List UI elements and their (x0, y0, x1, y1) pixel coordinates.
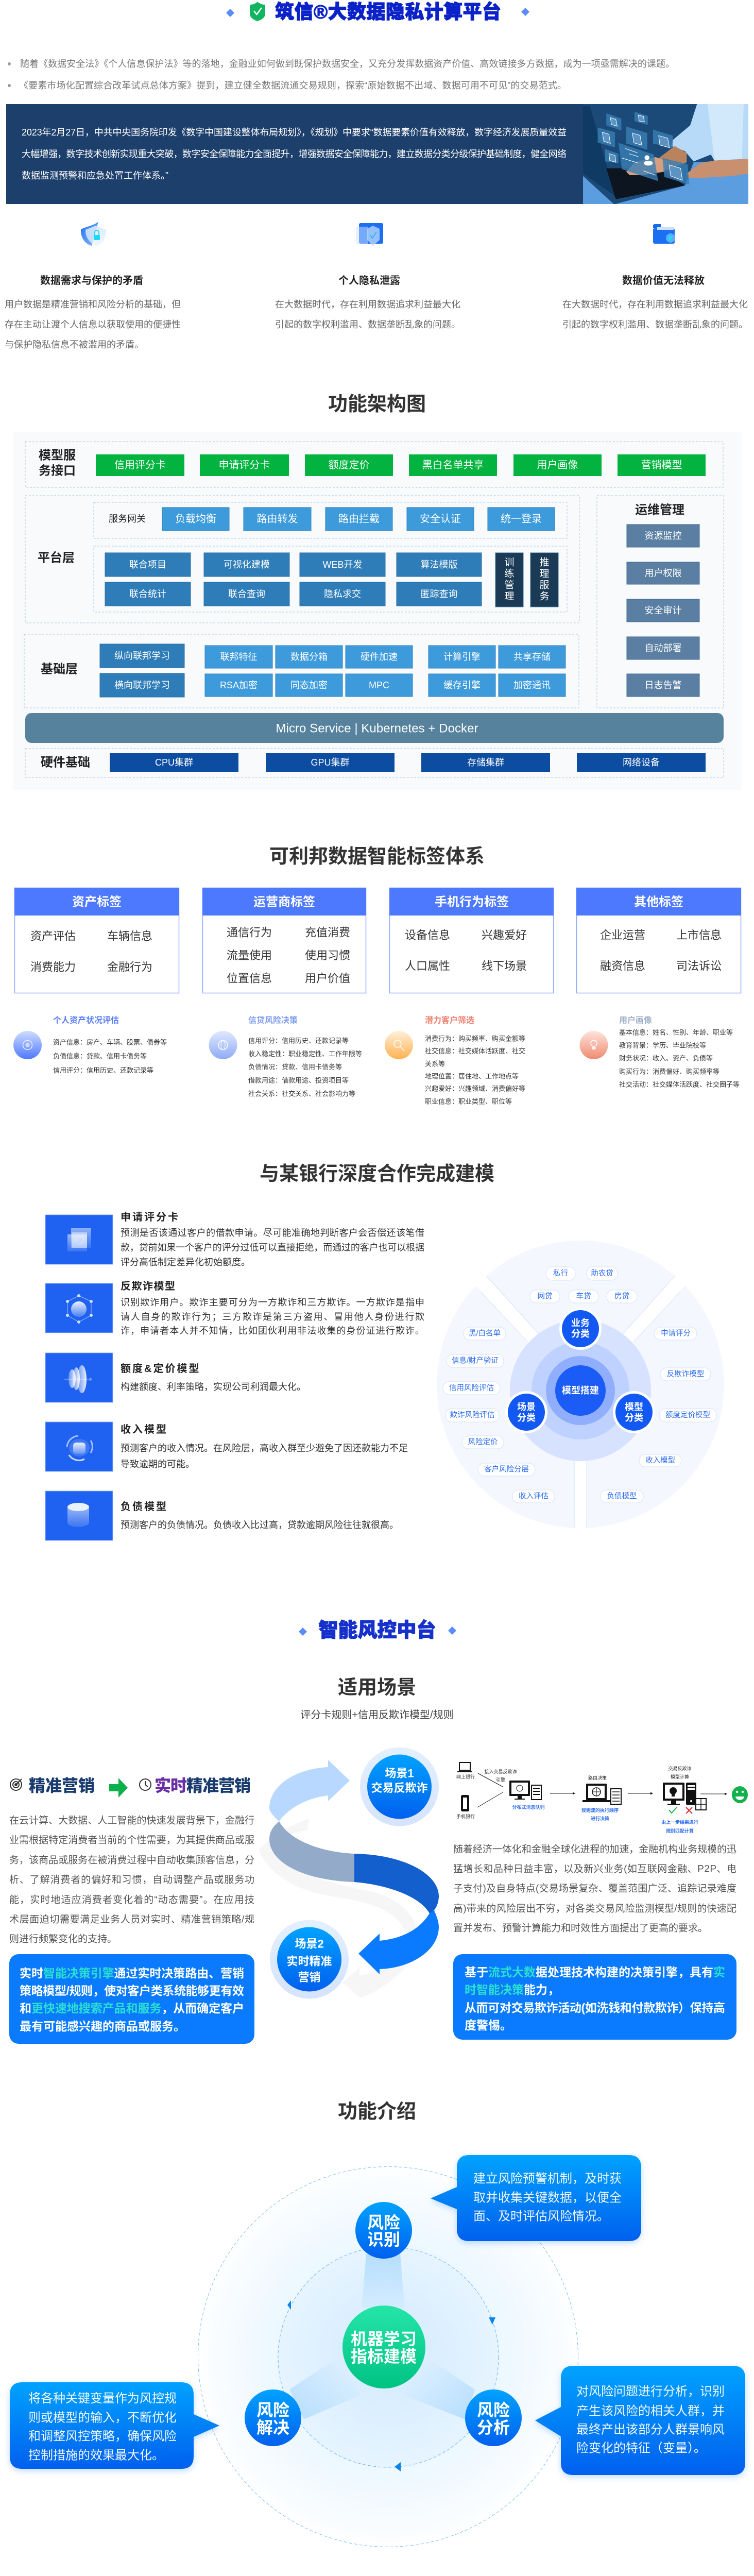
card: carrier labels: 通信行为 (227, 926, 272, 939)
row: platform layer: 联合项目 (129, 560, 166, 570)
text block: marketing description (9, 1815, 254, 1944)
use case: user profile: 财务状况：收入、资产、负债等 (619, 1054, 713, 1062)
flow diagram: transaction anti-fraud (456, 1762, 748, 1834)
callout: resolution: 控制措施的效果最大化。 (28, 2448, 164, 2463)
text: card three: 引起的数字权利滥用、数据垄断乱象的问题。 (562, 319, 748, 330)
card: asset labels: 金融行为 (107, 960, 152, 974)
node: scenario 2: 营销 (298, 1971, 321, 1984)
node: risk analysis: 风险 (477, 2401, 510, 2419)
callout: resolution: 和调整风控策略，确保风险 (28, 2430, 177, 2443)
use case: potential customers: 潜力客户筛选 (425, 1015, 474, 1025)
text block: scenario description: 猛增长和品种日益丰富，以及新兴业务(如互联网金融、P2P、电 (453, 1863, 736, 1874)
flow diagram: transaction anti-fraud: 进行决策 (591, 1816, 609, 1821)
row: model service interface: 申请评分卡 (218, 459, 270, 471)
row: hardware base: 网络设备 (623, 757, 660, 768)
panel: precise marketing: 实时精准营销 (155, 1776, 251, 1795)
pills: models: 额度定价模型 (665, 1411, 710, 1419)
callout: analysis: 险变化的特征（变量）。 (576, 2441, 706, 2455)
concentric circles: 模型搭建 (562, 1385, 599, 1396)
model: income: 收入模型 (121, 1423, 168, 1435)
model: quota and pricing (45, 1353, 306, 1402)
model: anti-fraud (45, 1280, 424, 1336)
pills: models (601, 1327, 716, 1503)
node: risk resolution: 解决 (256, 2418, 289, 2437)
use case: credit risk: 社会关系：社交关系、社会影响力等 (248, 1090, 355, 1097)
flow diagram: transaction anti-fraud: 引擎 (496, 1777, 505, 1783)
row: platform layer: 训 (504, 556, 515, 568)
node: risk analysis: 分析 (477, 2418, 510, 2437)
column: operations management: 运维管理 (635, 503, 684, 517)
intro bullet points: 随着《数据安全法》《个人信息保护法》等的落地，金融业如何做到既保护数据安全，又充分发挥数据资产价值、高效链接多方数据，成为一项亟需解决的课题。 (20, 59, 675, 69)
text: card two (275, 275, 460, 330)
flow diagram: transaction anti-fraud: 接入交易反欺诈 (484, 1769, 517, 1774)
node: scenario class: 场景 (517, 1402, 536, 1412)
card: phone behaviour labels: 兴趣爱好 (482, 928, 527, 942)
column: operations management: 资源监控 (645, 531, 682, 541)
card: carrier labels: 使用习惯 (305, 949, 350, 962)
row: model service interface: 用户画像 (537, 459, 578, 471)
pills: scenarios (443, 1327, 555, 1503)
use case: potential customers: 关系等 (425, 1060, 445, 1067)
card: phone behaviour labels: 线下场景 (482, 959, 527, 973)
node: machine learning modelling: 指标建模 (351, 2347, 417, 2366)
bar: micro service: Micro Service | Kubernetes + Docker (276, 721, 478, 736)
card: other labels: 司法诉讼 (676, 959, 722, 973)
use case: credit risk: 收入稳定性：职业稳定性、工作年限等 (248, 1050, 362, 1058)
column: operations management: 用户权限 (645, 568, 682, 578)
use case: user profile: 教育背景：学历、毕业院校等 (619, 1042, 706, 1049)
use case: user profile: 用户画像 (619, 1015, 652, 1025)
row: platform layer: WEB开发 (322, 560, 363, 570)
heading: bank co-modelling: 与某银行深度合作完成建模 (260, 1163, 494, 1185)
card: other labels (576, 888, 741, 993)
node: risk identification (355, 2202, 412, 2259)
card: carrier labels: 流量使用 (227, 949, 272, 962)
icon: queue monitor (509, 1781, 541, 1800)
use case: potential customers: 地理位置：居住地、工作地点等 (425, 1073, 519, 1080)
text: card one: 数据需求与保护的矛盾 (40, 275, 143, 286)
text block: scenario description: 子支付)及自身特点(交易场景复杂、覆盖范围广泛、追踪记录难度 (453, 1883, 736, 1894)
model: quota and pricing: 额度&定价模型 (121, 1362, 200, 1375)
callout: resolution: 将各种关键变量作为风控规 (28, 2392, 177, 2405)
node: business class (559, 1308, 602, 1350)
panel: label use cases (13, 1015, 740, 1106)
pills: scenarios: 欺诈风险评估 (450, 1411, 494, 1419)
concentric circles (510, 1320, 651, 1461)
use case: personal assets: 个人资产状况评估 (53, 1015, 119, 1025)
use case: potential customers: 兴趣爱好：兴趣领域、消费偏好等 (425, 1085, 525, 1092)
callout: identification: 面、及时评估风险情况。 (473, 2209, 609, 2224)
card: carrier labels: 运营商标签 (253, 895, 315, 909)
callout: streaming engine: 时智能决策能力， (465, 1983, 559, 1996)
section: bank co-modelling (45, 1163, 724, 1540)
row: foundation layer: 纵向联邦学习 (114, 651, 170, 661)
use case: credit risk (209, 1015, 362, 1097)
panel: label cards (14, 888, 741, 993)
pills: models: 负债模型 (607, 1492, 637, 1500)
callout: decision engine (9, 1954, 254, 2044)
flow diagram: transaction anti-fraud: 规则流的执行顺序 (581, 1807, 619, 1813)
use case: user profile: 基本信息：姓名、性别、年龄、职业等 (619, 1028, 733, 1037)
card: phone behaviour labels (389, 888, 554, 993)
node: risk resolution (245, 2389, 301, 2446)
text block: scenario description: 置并发布、预警计算能力和时效性方面提出了更高的要求。 (453, 1923, 708, 1934)
pills: business types: 车贷 (576, 1292, 591, 1300)
row: foundation layer: 缓存引擎 (443, 680, 481, 690)
callout: analysis (535, 2366, 745, 2475)
callout: analysis: 对风险问题进行分析，识别 (576, 2384, 725, 2399)
flow diagram: transaction anti-fraud: 网上银行 (456, 1774, 475, 1780)
use case: credit risk: 信贷风险决策 (248, 1015, 298, 1025)
row: platform layer: 管 (504, 579, 515, 590)
card: other labels: 其他标签 (634, 895, 683, 909)
use case: potential customers: 社交信息：社交媒体活跃度、社交 (425, 1047, 525, 1055)
flow diagram: transaction anti-fraud: 交易反欺诈 (668, 1766, 692, 1771)
node: model class: 分类 (625, 1413, 643, 1423)
row: model service interface: 信用评分卡 (114, 459, 166, 471)
panel: policy quote with photo: 2023年2月27日，中共中央国务院印发《数字中国建设整体布局规划》，《规划》中要求“数据要素价值有效释放，数字经济发展质量效益 (22, 127, 567, 138)
row: foundation layer: 硬件加速 (361, 652, 398, 662)
row: platform layer: 安全认证 (420, 513, 461, 524)
callout: streaming engine: 从而可对交易欺诈活动(如洗钱和付款欺诈）保持高 (465, 2001, 725, 2014)
callout: identification: 建立风险预警机制，及时获 (473, 2172, 622, 2185)
panel: functional architecture diagram (13, 432, 742, 790)
text block: marketing description: 析、了解消费者的偏好和习惯，自动调整产品或服务功 (9, 1874, 254, 1886)
callout: streaming engine: 基于流式大数据处理技术构建的决策引擎，具有实 (465, 1965, 725, 1979)
node: machine learning modelling: 机器学习 (351, 2330, 417, 2348)
column: operations management (597, 496, 724, 708)
heading: applicable scenarios: 评分卡规则+信用反欺诈模型/规则 (300, 1709, 454, 1721)
text block: scenario description: 随着经济一体化和金融全球化进程的加速，金融机构业务规模的迅 (453, 1843, 736, 1855)
node: scenario 1 (360, 1748, 439, 1826)
card: carrier labels: 位置信息 (227, 972, 272, 985)
flow diagram: transaction anti-fraud: 分布式消息队列 (512, 1804, 545, 1810)
model: liabilities (45, 1491, 399, 1540)
text block: marketing description: 能，实时地适应消费者变化着的“动态需要”。在应用技 (9, 1894, 254, 1905)
row: platform layer: 负载均衡 (175, 513, 216, 524)
model: application scorecard: 评分高低制定差异化初始额度。 (121, 1257, 250, 1267)
card: phone behaviour labels: 设备信息 (405, 928, 450, 942)
heading: applicable scenarios: 适用场景 (338, 1677, 416, 1699)
model: application scorecard: 预测是否该通过客户的借款申请。尽可能准确地判断客户会否偿还该笔借 (121, 1228, 424, 1238)
row: platform layer: 路由转发 (256, 513, 298, 524)
callout: analysis: 产生该风险的相关人群，并 (576, 2404, 725, 2418)
panel: policy quote with photo (6, 104, 749, 205)
node: model class: 模型 (625, 1402, 643, 1412)
flow diagram: transaction anti-fraud: 模型计算 (671, 1774, 689, 1780)
arrow: green (109, 1778, 128, 1798)
text: card one: 存在主动让渡个人信息以获取使用的便捷性 (5, 319, 181, 330)
card: other labels: 企业运营 (600, 928, 645, 942)
row: platform layer: 练 (504, 568, 515, 579)
node: risk identification: 识别 (367, 2230, 400, 2249)
heading: functional architecture: 功能架构图 (328, 394, 426, 415)
text: card one (5, 275, 181, 350)
row: platform layer: 可视化建模 (224, 560, 270, 570)
chart: radial model classification (437, 1241, 724, 1540)
row: platform layer (25, 496, 579, 623)
callout: analysis: 最终产出该部分人群景响风 (576, 2422, 725, 2437)
node: business class: 分类 (571, 1329, 590, 1339)
model: income: 预测客户的收入情况。在风险层，高收入群至少避免了因还款能力不足 (121, 1443, 408, 1453)
flow diagram: transaction anti-fraud: 规则匹配计算 (666, 1828, 694, 1834)
row: foundation layer: 同态加密 (290, 680, 328, 690)
pills: models: 反欺诈模型 (667, 1369, 704, 1379)
model: liabilities: 预测客户的负债情况。负债收入比过高，贷款逾期风险往往就很高。 (121, 1520, 399, 1530)
model: quota and pricing: 构建额度、利率策略，实现公司利润最大化。 (121, 1382, 306, 1392)
card: other labels: 融资信息 (600, 959, 645, 973)
heading: smart risk control platform (248, 1619, 508, 1641)
row: foundation layer: 共享存储 (513, 652, 551, 662)
callout: streaming engine (453, 1954, 736, 2040)
text: card three (562, 275, 748, 330)
section: smart labels (13, 846, 742, 1106)
model: liabilities: 负债模型 (121, 1501, 168, 1513)
heading: smart label system: 可利邦数据智能标签体系 (269, 846, 485, 868)
flow diagram: transaction anti-fraud: 手机银行 (456, 1814, 475, 1819)
callout: decision engine: 实时智能决策引擎通过实时决策路由、营销 (20, 1967, 244, 1980)
use case: potential customers (385, 1015, 525, 1106)
node: scenario 2: 实时精准 (286, 1955, 332, 1968)
icon: document with shield (356, 223, 383, 246)
card: asset labels: 车辆信息 (107, 929, 152, 943)
card: asset labels: 资产评估 (30, 929, 76, 943)
node: business class: 业务 (571, 1318, 590, 1328)
callout: resolution: 则或模型的输入，不断优化 (28, 2411, 177, 2425)
row: hardware base (25, 749, 724, 777)
pills: business types (530, 1267, 637, 1303)
pills: scenarios: 黑/白名单 (469, 1329, 501, 1337)
card: phone behaviour labels: 人口属性 (405, 959, 450, 973)
node: scenario 2: 场景2 (295, 1937, 324, 1951)
photo: hands on laptop with floating documents (583, 104, 749, 205)
node: scenario 1: 交易反欺诈 (371, 1782, 428, 1794)
node: model class (613, 1391, 655, 1433)
node: scenario class: 分类 (517, 1413, 536, 1423)
row: model service interface: 模型服 (39, 448, 76, 463)
pills: business types: 私行 (553, 1269, 568, 1278)
row: platform layer: 服务网关 (109, 514, 146, 524)
use case: personal assets: 信用评分：信用历史、还款记录等 (53, 1066, 153, 1074)
use case: personal assets: 资产信息：房产、车辆、股票、债券等 (53, 1039, 167, 1046)
column: operations management: 日志告警 (645, 680, 682, 690)
icon: folder with lock (653, 224, 675, 244)
text block: marketing description: 业需根据特定消费者当前的个性需要，为其提供商品或服 (9, 1834, 254, 1845)
panel: precise marketing: 精准营销 (29, 1776, 95, 1795)
pills: scenarios: 收入评估 (519, 1492, 549, 1500)
use case: potential customers: 消费行为：购买频率、购买金额等 (425, 1035, 525, 1043)
title: platform heading: 筑信®大数据隐私计算平台 (275, 1, 501, 23)
node: scenario 2 (270, 1920, 349, 1999)
callout: decision engine: 和更快速地搜索产品和服务，从而确定客户 (20, 2002, 244, 2015)
card: other labels: 上市信息 (676, 928, 722, 942)
node: risk identification: 风险 (367, 2213, 400, 2232)
row: foundation layer (24, 634, 579, 708)
icon: model computer (663, 1783, 706, 1810)
card: asset labels: 资产标签 (72, 895, 122, 909)
callout: identification (431, 2155, 641, 2241)
row: model service interface (25, 442, 723, 487)
pills: scenarios: 风险定价 (468, 1437, 498, 1447)
row: model service interface: 务接口 (39, 464, 76, 478)
use case: personal assets: 负债信息：贷款、信用卡债务等 (53, 1052, 147, 1060)
panel: policy quote with photo: 数据监测预警和应急处置工作体系。” (22, 171, 168, 181)
model: anti-fraud: 识别欺诈用户。欺诈主要可分为一方欺诈和三方欺诈。一方欺诈是指申 (121, 1297, 424, 1308)
use case: potential customers: 职业信息：职业类型、职位等 (425, 1097, 512, 1106)
row: platform layer: 统一登录 (501, 513, 542, 524)
model: anti-fraud: 反欺诈模型 (121, 1280, 176, 1292)
node: scenario 1: 场景1 (385, 1767, 414, 1780)
row: hardware base: GPU集群 (311, 757, 350, 768)
heading: applicable scenarios (300, 1677, 454, 1721)
text block: scenario description: 高)带来的风险层出不穷，对各类交易风险监测模型/规则的快速配 (453, 1903, 736, 1914)
row: platform layer: 服 (539, 580, 550, 590)
card: phone behaviour labels: 手机行为标签 (435, 895, 509, 909)
card: asset labels (14, 888, 179, 993)
row: platform layer: 路由拦截 (338, 513, 380, 524)
section: smart risk control scenarios (9, 1619, 748, 2044)
panel: anti-fraud scenario (453, 1762, 748, 2040)
use case: credit risk: 负债情况：贷款、信用卡债务等 (248, 1063, 342, 1071)
use case: user profile (580, 1015, 740, 1088)
row: platform layer: 理 (504, 591, 515, 602)
heading: feature introduction: 功能介绍 (338, 2101, 416, 2123)
row: hardware base: 存储集群 (467, 757, 504, 768)
callout: identification: 取并收集关键数据，以便全 (473, 2191, 622, 2205)
row: platform layer: 平台层 (38, 550, 75, 565)
use case: credit risk: 信用评分：信用历史、还款记录等 (248, 1037, 349, 1045)
row: foundation layer: 数据分箱 (290, 652, 328, 662)
icon: smiley (732, 1786, 748, 1803)
intro bullet points (8, 59, 675, 91)
bar: micro service (25, 713, 724, 743)
row: model service interface: 额度定价 (329, 459, 370, 471)
column: operations management: 安全审计 (645, 605, 682, 616)
row: foundation layer: 横向联邦学习 (114, 680, 170, 690)
row: foundation layer: 联邦特征 (220, 652, 258, 662)
panel: model list (45, 1211, 424, 1540)
pills: scenarios: 客户风险分层 (484, 1465, 529, 1473)
row: hardware base: CPU集群 (155, 757, 193, 768)
row: model service interface: 营销模型 (641, 459, 682, 471)
node: scenario class (505, 1391, 547, 1433)
model: income (45, 1422, 408, 1471)
callout: resolution (10, 2382, 219, 2469)
icon: target (10, 1779, 22, 1790)
model: income: 导致逾期的可能。 (121, 1459, 195, 1469)
node: risk analysis (465, 2389, 522, 2446)
row: platform layer: 算法模版 (420, 560, 457, 570)
row: platform layer: 务 (539, 590, 550, 602)
card: asset labels: 消费能力 (30, 960, 76, 974)
pills: business types: 助农贷 (591, 1269, 613, 1278)
heading: smart risk control platform: 智能风控中台 (318, 1619, 436, 1641)
column: operations management: 自动部署 (645, 643, 682, 653)
callout: decision engine: 最有可能感兴趣的商品或服务。 (20, 2020, 185, 2033)
text: card two: 引起的数字权利滥用、数据垄断乱象的问题。 (275, 319, 460, 330)
text: card three: 数据价值无法释放 (622, 275, 705, 286)
use case: credit risk: 借款用途：借款用途、投资项目等 (248, 1077, 349, 1084)
row: hardware base: 硬件基础 (41, 755, 90, 770)
chart: S-shaped scenario flow (259, 1748, 439, 1999)
text: card two: 个人隐私泄露 (338, 275, 400, 286)
model: application scorecard: 申请评分卡 (121, 1211, 180, 1223)
row: foundation layer: RSA加密 (220, 680, 258, 690)
node: risk resolution: 风险 (256, 2401, 289, 2419)
text block: marketing description: 术层面迫切需要满足业务人员对实时、精准营销策略/规 (9, 1913, 254, 1925)
row: platform layer: 联合统计 (129, 589, 166, 599)
panel: policy quote with photo: 大幅增强，数字技术创新实现重大突破，数字安全保障能力全面提升，增强数据安全保障能力，建立数据分类分级保护基础制度，健全网络 (22, 149, 567, 159)
text: card one: 与保护隐私信息不被滥用的矛盾。 (5, 340, 144, 350)
row: foundation layer: 基础层 (41, 663, 78, 676)
intro bullet points: 《要素市场化配置综合改革试点总体方案》提到，建立健全数据流通交易规则，探索“原始数据不出域、数据可用不可见”的交易范式。 (19, 80, 567, 91)
text block: scenario description (453, 1843, 736, 1934)
chart: risk cycle (10, 2155, 745, 2547)
callout: decision engine: 策略模型/规则，使对客户类系统能够更有效 (20, 1984, 244, 1997)
model: application scorecard: 款，贷前如果一个客户的评分过低可以直接拒绝，而通过的客户也可以根据 (121, 1243, 424, 1253)
icon: clock (140, 1779, 151, 1790)
node: machine learning modelling (342, 2306, 425, 2388)
panel: precise marketing (9, 1776, 254, 2044)
card: carrier labels: 充值消费 (305, 926, 350, 939)
text: card one: 用户数据是精准营销和风险分析的基础，但 (5, 299, 181, 310)
pills: models: 申请评分 (661, 1329, 691, 1337)
row: platform layer: 理 (539, 569, 550, 579)
panel: three problem cards (5, 222, 748, 350)
section: feature introduction (6, 2101, 749, 2547)
model: anti-fraud: 诈，申请者本人并不知情，比如团伙利用非法收集的身份证进行欺诈。 (121, 1326, 424, 1336)
row: platform layer: 推 (539, 556, 550, 568)
pills: models: 收入模型 (645, 1456, 675, 1465)
text block: marketing description: 务，该商品或服务在被消费过程中自动收集顾客信息，分 (9, 1855, 254, 1866)
use case: user profile: 购买行为：消费偏好、购买频率等 (619, 1067, 719, 1076)
model: application scorecard (45, 1211, 424, 1267)
text: card three: 在大数据时代，存在利用数据追求利益最大化 (562, 299, 748, 310)
text block: marketing description: 则进行频繁变化的支持。 (9, 1933, 117, 1944)
icon: routing laptop (582, 1784, 621, 1804)
pills: business types: 房贷 (614, 1292, 629, 1300)
card: carrier labels (202, 888, 366, 993)
section: functional architecture (24, 394, 724, 778)
section: intro (5, 1, 748, 350)
text block: marketing description: 在云计算、大数据、人工智能的快速发展背景下，金融行 (9, 1815, 254, 1826)
pills: business types: 网贷 (538, 1292, 552, 1300)
row: model service interface: 黑白名单共享 (422, 459, 484, 471)
pills: scenarios: 信用风险评估 (449, 1384, 494, 1392)
title: platform heading (175, 1, 582, 23)
model: anti-fraud: 请人自身的欺诈行为；三方欺诈是第三方盗用、冒用他人身份进行欺 (121, 1312, 424, 1322)
flow diagram: transaction anti-fraud: 路由决策 (588, 1775, 607, 1781)
row: foundation layer: 计算引擎 (443, 652, 481, 662)
pills: scenarios: 信息/财产验证 (452, 1356, 499, 1365)
row: platform layer: 隐私求交 (324, 589, 361, 599)
row: platform layer: 联合查询 (228, 589, 265, 599)
use case: user profile: 社交活动：社交媒体活跃度、社交圈子等 (619, 1081, 740, 1088)
row: foundation layer: MPC (369, 680, 389, 690)
row: foundation layer: 加密通讯 (513, 680, 551, 690)
icon: shield with lock (81, 222, 106, 246)
card: carrier labels: 用户价值 (305, 972, 350, 985)
use case: personal assets (13, 1015, 167, 1074)
row: platform layer: 匿踪查询 (420, 589, 457, 599)
text: card two: 在大数据时代，存在利用数据追求利益最大化 (275, 299, 460, 310)
callout: streaming engine: 度警惕。 (465, 2019, 512, 2032)
flow diagram: transaction anti-fraud: 由上一步结果进行 (661, 1819, 698, 1825)
